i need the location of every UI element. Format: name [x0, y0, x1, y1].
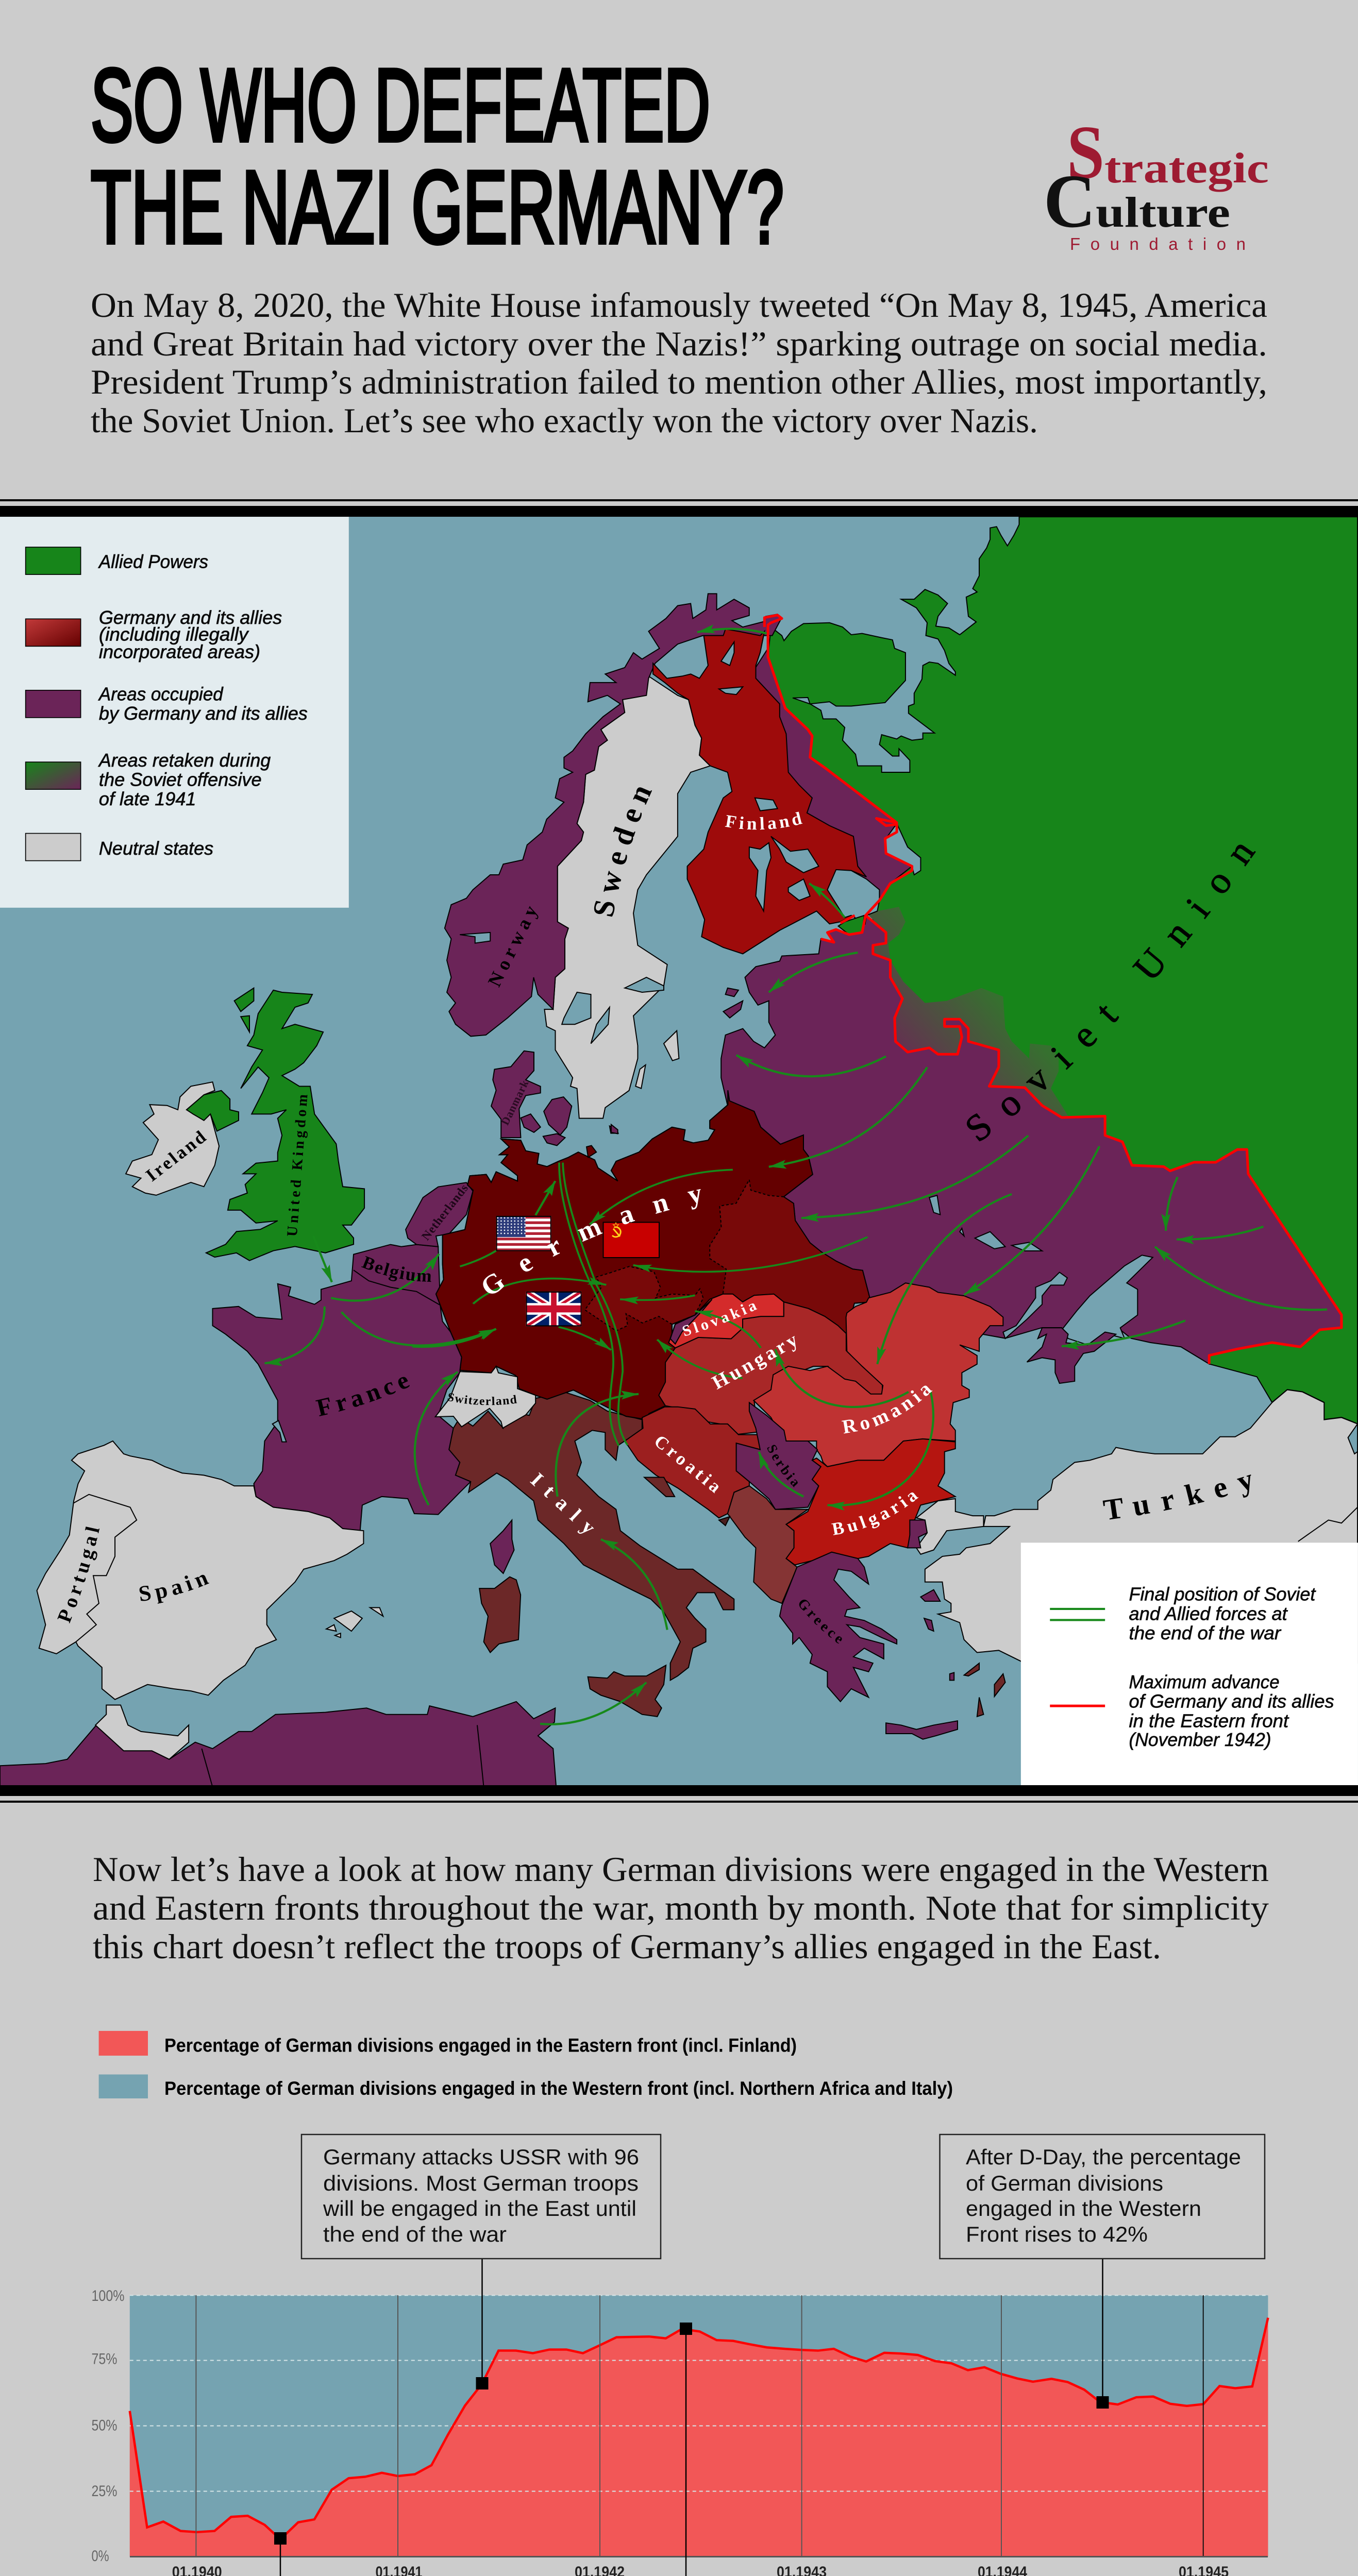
legend labels: Final position of Soviet [1129, 1584, 1316, 1604]
chart legend: Percentage of German divisions engaged in the Western front (incl. Northern Africa and Italy) [164, 2078, 953, 2099]
flag: United States [496, 1216, 551, 1251]
Finnish lakes [719, 642, 819, 911]
Western front area [130, 2295, 1268, 2556]
legend labels: in the Eastern front [1129, 1710, 1289, 1732]
x axis labels [172, 2564, 1229, 2576]
y axis labels: 25% [92, 2483, 118, 2500]
labels west: France [314, 1365, 417, 1422]
arrows: Soviet advance in north [697, 629, 886, 1076]
labels Finland and Soviet Union [724, 807, 1273, 1150]
year gridlines [130, 2295, 1268, 2556]
legend key: final position [1050, 1609, 1105, 1620]
leader lines [280, 2259, 1103, 2576]
chart intro text [93, 1850, 1269, 1966]
Belgium border [354, 1270, 443, 1307]
Dalmatian fragment [719, 1517, 730, 1526]
chart intro text: Now let’s have a look at how many German divisions were engaged in the Western [93, 1850, 1269, 1889]
Bulgaria [786, 1439, 955, 1565]
callout: Germany attacks USSR: the end of the war [323, 2222, 507, 2246]
legend labels: and Allied forces at [1129, 1603, 1288, 1624]
chart intro text: and Eastern fronts throughout the war, month by month. Note that for simplicity [93, 1888, 1269, 1927]
inland waters [929, 1195, 1357, 1454]
Danish islands [521, 1097, 618, 1145]
labels east: Serbia [764, 1442, 805, 1491]
chart legend [99, 2031, 953, 2099]
Scotland Hebrides [234, 988, 254, 1032]
intro text: On May 8, 2020, the White House infamously tweeted “On May 8, 1945, America [91, 285, 1267, 325]
eastern territories [721, 517, 1357, 1424]
legend labels [98, 551, 308, 859]
Serbia [736, 1402, 821, 1510]
Norway [445, 594, 782, 1036]
Norwegian fjords [460, 933, 490, 943]
labels Finland and Soviet Union: Finland [725, 812, 803, 829]
Albania and Montenegro [728, 1486, 808, 1603]
Lake Onega [886, 823, 920, 875]
callout: Germany attacks USSR: will be engaged in the East until [323, 2196, 636, 2221]
map legend: bottom right [1021, 1543, 1358, 1786]
legend key: maximum advance [1050, 1704, 1105, 1707]
area chart [92, 2287, 1268, 2576]
callout: Germany attacks USSR [301, 2134, 661, 2259]
Soviet Union [768, 517, 1357, 1424]
y axis labels: 0% [92, 2548, 109, 2565]
Portugal border [74, 1495, 137, 1642]
legend labels: (November 1942) [1129, 1729, 1271, 1750]
labels east: Bulgaria [830, 1483, 925, 1539]
Brittany-Biscay inlet [273, 1420, 287, 1442]
Leningrad pocket [838, 916, 864, 935]
labels west: Belgium [359, 1252, 433, 1286]
logo: Strategic Culture Foundation: S [1067, 110, 1104, 195]
Croatia [625, 1407, 760, 1518]
swatch: neutral states [26, 834, 81, 861]
legend labels: incorporated areas) [99, 641, 260, 663]
swatch: Allied Powers [26, 547, 81, 574]
map legend: top left [0, 517, 349, 908]
occupied slice of Slovakia [670, 1299, 712, 1344]
Bohemia area [585, 1266, 703, 1331]
labels west: Italy [526, 1468, 607, 1545]
North Africa [0, 1702, 556, 1787]
title: THE NAZI GERMANY? [91, 150, 784, 265]
Netherlands [406, 1182, 473, 1247]
arrows: Soviet advance in south [759, 1067, 1327, 1505]
callout: After D-Day: After D-Day, the percentage [966, 2145, 1241, 2169]
Sea of Azov [1062, 1255, 1153, 1345]
labels west [54, 1091, 728, 1625]
labels east [680, 1295, 1269, 1649]
callout: Germany attacks USSR: Germany attacks USSR with 96 [323, 2145, 639, 2169]
chart legend: Percentage of German divisions engaged in the Eastern front (incl. Finland) [164, 2035, 797, 2056]
sea [0, 517, 1358, 1785]
Hungary [659, 1302, 882, 1435]
legend labels: the Soviet offensive [99, 769, 262, 790]
flag: Soviet Union [603, 1222, 659, 1258]
callouts [130, 2134, 1265, 2576]
Spain [37, 1441, 363, 1700]
callout: After D-Day [940, 2134, 1265, 2259]
legend labels: Maximum advance [1129, 1671, 1280, 1692]
Estonian islands [726, 988, 739, 996]
Northern Ireland [187, 1091, 239, 1131]
Slovakia [668, 1294, 784, 1348]
callout: After D-Day: engaged in the Western [966, 2196, 1201, 2221]
Lake Ladoga [827, 870, 879, 924]
Romania [753, 1283, 1003, 1467]
legend labels: Neutral states [99, 838, 213, 859]
Baltic islands [610, 1031, 679, 1133]
dashed annexation borders [585, 1180, 784, 1331]
callout: After D-Day: of German divisions [966, 2171, 1163, 2195]
intro text: and Great Britain had victory over the Nazis!” sparking outrage on social media. [91, 324, 1267, 363]
Germany outline [436, 1090, 871, 1423]
incorporated eastern areas [710, 1180, 871, 1333]
Sweden [544, 676, 710, 1118]
United Kingdom [206, 990, 364, 1261]
Greece [780, 1552, 897, 1702]
Balearic islands [326, 1607, 383, 1637]
France, Belgium [212, 1245, 471, 1531]
labels west: Portugal [54, 1521, 105, 1625]
Aegean islands [920, 1590, 1005, 1717]
arrows: Western front [264, 1236, 667, 1724]
labels east: Greece [794, 1596, 849, 1649]
country labels north [483, 773, 661, 1127]
Scandinavia [126, 594, 782, 1261]
panel: map of Europe [0, 517, 1358, 1787]
Italy [449, 1392, 734, 1680]
Crimea [1027, 1328, 1116, 1383]
North Africa borders [202, 1725, 484, 1787]
Western Europe and Mediterranean [0, 1182, 734, 1787]
logo: Strategic Culture Foundation: ulture [1096, 189, 1230, 236]
Turkey [925, 1390, 1357, 1663]
logo: Strategic Culture Foundation [1044, 110, 1269, 253]
intro text [91, 285, 1267, 440]
Ireland [126, 1082, 219, 1195]
labels west: Switzerland [446, 1391, 518, 1408]
legend labels: (including illegally [99, 624, 249, 645]
labels west: Ireland [145, 1130, 207, 1182]
Balkans [625, 1195, 1357, 1739]
labels west: United Kingdom [287, 1095, 308, 1236]
gridlines [130, 2295, 1268, 2491]
logo: Strategic Culture Foundation: C [1044, 159, 1096, 244]
Dnieper estuary [1003, 1272, 1067, 1338]
Finland [653, 629, 920, 954]
country labels north: Norway [488, 906, 539, 988]
Germany and neighbours [435, 1051, 882, 1435]
y axis labels [92, 2287, 125, 2565]
title: SO WHO DEFEATED [91, 48, 710, 163]
legend labels: by Germany and its allies [99, 703, 308, 724]
chart intro text: this chart doesn’t reflect the troops of Germany’s allies engaged in the East. [93, 1927, 1161, 1966]
flag: United Kingdom [526, 1292, 581, 1327]
Baltic islet [586, 1145, 596, 1157]
legend labels: the end of the war [1129, 1622, 1282, 1643]
occupied Soviet territory [721, 916, 1342, 1364]
country labels north: Danmark [501, 1081, 529, 1126]
Spanish Morocco [95, 1705, 189, 1759]
areas retaken in late 1941 [866, 907, 1068, 1117]
y axis labels: 100% [92, 2287, 125, 2304]
Crete [886, 1721, 958, 1739]
arrows and final front line over Germany [412, 1163, 867, 1446]
logo: Strategic Culture Foundation: trategic [1104, 144, 1269, 192]
swatch: retaken areas [26, 762, 81, 789]
y axis labels: 50% [92, 2417, 118, 2434]
swatch: Germany and its allies [26, 619, 81, 646]
European Turkey [916, 1499, 983, 1554]
Dalmatian coast fragment [644, 1478, 675, 1497]
labels east: Romania [841, 1376, 938, 1438]
callout: Germany attacks USSR: divisions. Most German troops [323, 2171, 639, 2195]
labels west: Croatia [650, 1431, 728, 1499]
legend labels: of Germany and its allies [1129, 1691, 1334, 1711]
Swedish lakes and gulf [562, 977, 664, 1044]
legend labels: Allied Powers [98, 551, 208, 572]
map frame bars [0, 499, 1358, 1803]
Thrace [908, 1520, 927, 1548]
labels east: Hungary [709, 1328, 804, 1394]
labels east: Turkey [1101, 1459, 1269, 1527]
swatch: occupied areas [26, 690, 81, 718]
Switzerland [435, 1366, 535, 1428]
Denmark [491, 1051, 541, 1138]
occupied strip beside Finland [751, 649, 912, 922]
Turkey southern border [1298, 1507, 1357, 1541]
logo: Strategic Culture Foundation: Foundation [1070, 234, 1246, 253]
labels west: Germany [475, 1173, 725, 1302]
Corsica [490, 1520, 514, 1573]
Eastern front area [130, 2318, 1268, 2556]
red data line [130, 2318, 1268, 2539]
plot [130, 2295, 1268, 2556]
country labels north: Sweden [594, 787, 652, 917]
labels west: Spain [137, 1564, 215, 1606]
Sicily [588, 1665, 666, 1717]
Germany [436, 1090, 871, 1423]
legend labels: Areas occupied [98, 684, 224, 705]
legend labels: Germany and its allies [99, 607, 282, 628]
labels west: Netherlands [419, 1181, 471, 1243]
markers [274, 2323, 1109, 2545]
labels Finland and Soviet Union: Soviet Union [967, 845, 1256, 1142]
intro text: President Trump’s administration failed to mention other Allies, most importantly, [91, 362, 1267, 401]
legend labels: of late 1941 [99, 788, 196, 809]
labels east: Slovakia [680, 1295, 762, 1340]
red line: maximum advance [764, 615, 1342, 1364]
final position double line [559, 1163, 628, 1446]
legend labels [1129, 1584, 1334, 1750]
legend labels: Areas retaken during [98, 750, 271, 771]
intro text: the Soviet Union. Let’s see who exactly won the victory over Nazis. [91, 401, 1038, 440]
title [91, 48, 784, 265]
callout: After D-Day: Front rises to 42% [966, 2222, 1148, 2246]
y axis labels: 75% [92, 2350, 118, 2368]
Sardinia [479, 1577, 521, 1652]
